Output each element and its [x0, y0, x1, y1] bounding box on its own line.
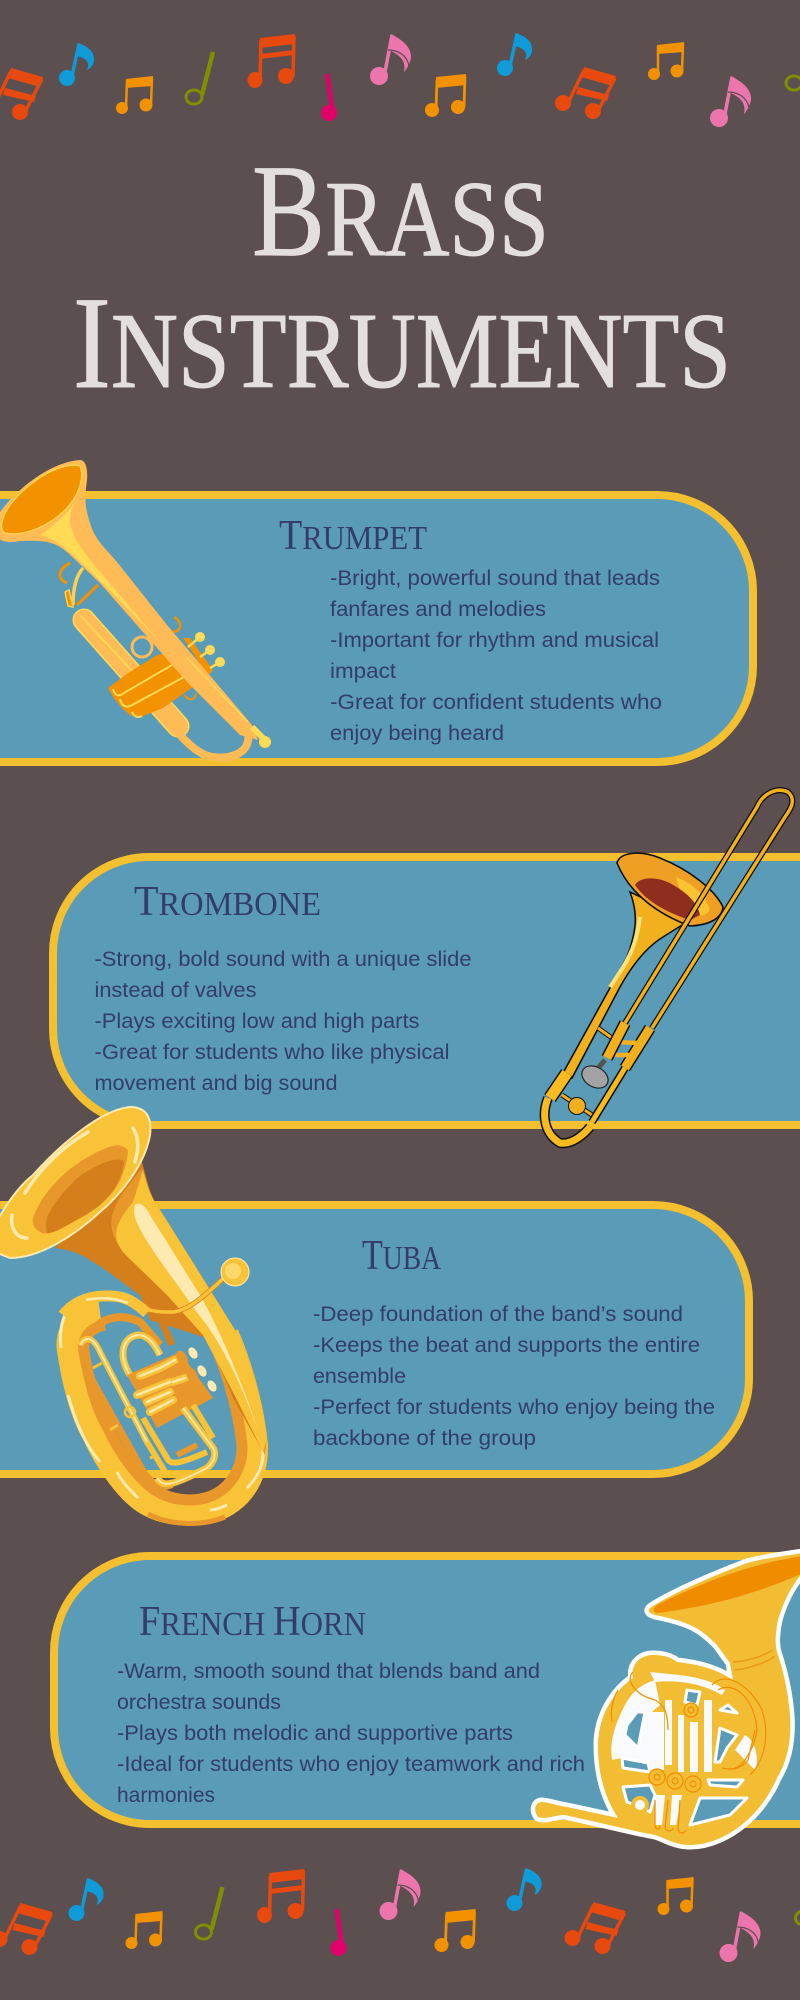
text block: trumpet facts: -Bright, powerful sound that leads — [330, 567, 660, 590]
text block: french horn facts: -Warm, smooth sound that blends band and — [117, 1660, 540, 1683]
icon: orange beamed note 3 — [648, 42, 684, 80]
text block: tuba facts — [313, 1303, 715, 1450]
panel: tuba — [0, 1205, 749, 1474]
text block: trombone facts: instead of valves — [94, 979, 256, 1002]
music notes: top row — [0, 33, 800, 127]
text block: trombone facts: -Great for students who like physical — [94, 1041, 450, 1064]
icon: olive half note — [186, 52, 213, 104]
text block: tuba facts: -Deep foundation of the band’s sound — [313, 1303, 683, 1326]
title — [73, 137, 731, 416]
icon: tuba — [0, 1107, 267, 1523]
text block: french horn facts — [117, 1660, 585, 1807]
panel background — [54, 1556, 800, 1824]
icon: red double-beam note 2 — [555, 67, 616, 119]
music notes: bottom row — [0, 1868, 800, 1962]
heading: Trombone: TROMBONE — [134, 879, 321, 925]
icon: red double-beam note — [248, 34, 295, 88]
text block: tuba facts: -Keeps the beat and supports the entire — [313, 1334, 700, 1357]
text block: trombone facts: -Plays exciting low and high parts — [94, 1010, 420, 1033]
text block: trombone facts: movement and big sound — [94, 1072, 338, 1095]
text block: trombone facts: -Strong, bold sound with a unique slide — [94, 948, 472, 971]
panel background — [0, 1205, 749, 1474]
panel background — [53, 857, 800, 1125]
text block: trumpet facts: enjoy being heard — [330, 722, 504, 745]
text block: trombone facts — [94, 948, 472, 1095]
text block: tuba facts: backbone of the group — [313, 1427, 536, 1450]
text block: trumpet facts — [330, 567, 662, 745]
text block: trumpet facts: -Great for confident students who — [330, 691, 662, 714]
icon: pink sixteenth note 2 — [710, 76, 751, 127]
icon: trombone — [545, 790, 792, 1143]
icon: red double-beam note left — [0, 68, 43, 120]
text block: french horn facts: -Ideal for students who enjoy teamwork and rich — [117, 1753, 585, 1776]
text block: french horn facts: -Plays both melodic and supportive parts — [117, 1722, 513, 1745]
text block: trumpet facts: impact — [330, 660, 396, 683]
icon: olive half note right — [786, 38, 800, 90]
panel: trombone — [53, 857, 800, 1125]
text block: tuba facts: -Perfect for students who enjoy being the — [313, 1396, 715, 1419]
icon: orange beamed note — [116, 76, 153, 114]
title line: Brass: BRASS — [252, 137, 549, 284]
icon: blue eighth note 2 — [497, 33, 532, 76]
heading: French Horn: FRENCH HORN — [139, 1599, 366, 1645]
text block: french horn facts: harmonies — [117, 1784, 215, 1807]
panel background — [0, 495, 753, 762]
icon: orange beamed note 2 — [425, 74, 466, 117]
text block: tuba facts: ensemble — [313, 1365, 406, 1388]
text block: trumpet facts: -Important for rhythm and musical — [330, 629, 659, 652]
icon: magenta quarter note — [321, 74, 337, 121]
text block: french horn facts: orchestra sounds — [117, 1691, 281, 1714]
icon: pink sixteenth note — [370, 34, 411, 85]
icon: trumpet — [0, 460, 271, 758]
panel: french horn — [54, 1556, 800, 1824]
icon: blue eighth note — [59, 43, 94, 86]
heading: Tuba: TUBA — [362, 1233, 441, 1279]
icon: french horn — [535, 1553, 800, 1845]
panel: trumpet — [0, 495, 753, 762]
heading: Trumpet: TRUMPET — [279, 513, 427, 559]
text block: trumpet facts: fanfares and melodies — [330, 598, 546, 621]
